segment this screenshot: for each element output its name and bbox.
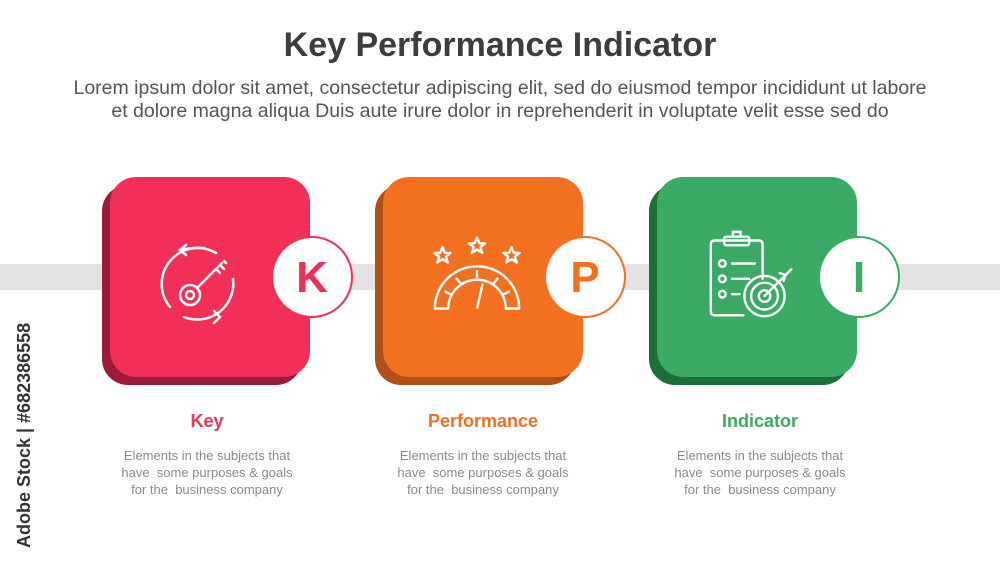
desc: key: for the business company [131,482,283,497]
label: key: Key [190,411,224,431]
icon: gauge [433,236,521,310]
desc: key: Elements in the subjects that [124,448,290,463]
panel: indicator [649,177,900,385]
desc: indicator [674,448,846,497]
label: performance: Performance [428,411,538,431]
icon: key [160,244,235,324]
desc: performance: for the business company [407,482,559,497]
badge I [818,236,900,318]
badge P [544,236,626,318]
badge P: P [570,253,600,302]
icon: clipboard target [710,230,793,318]
badge K [271,236,353,318]
desc: key [121,448,293,497]
desc: performance [397,448,569,497]
desc: performance: Elements in the subjects that [400,448,566,463]
side text: Adobe Stock | #682386558 [14,323,34,548]
badge I: I [853,253,865,302]
desc: indicator: Elements in the subjects that [677,448,843,463]
panel: performance [375,177,626,385]
panel: key [102,177,353,385]
desc: performance: have some purposes & goals [397,465,569,480]
desc: indicator: have some purposes & goals [674,465,846,480]
label: indicator: Indicator [722,411,798,431]
subtitle: Lorem ipsum dolor sit amet, consectetur adipiscing elit, sed do eiusmod tempor incididunt ut labore [73,77,927,99]
badge K: K [296,253,328,302]
subtitle: et dolore magna aliqua Duis aute irure dolor in reprehenderit in voluptate velit esse sed do [111,100,889,122]
subtitle [73,77,927,122]
title: Key Performance Indicator [284,26,716,64]
desc: key: have some purposes & goals [121,465,293,480]
desc: indicator: for the business company [684,482,836,497]
